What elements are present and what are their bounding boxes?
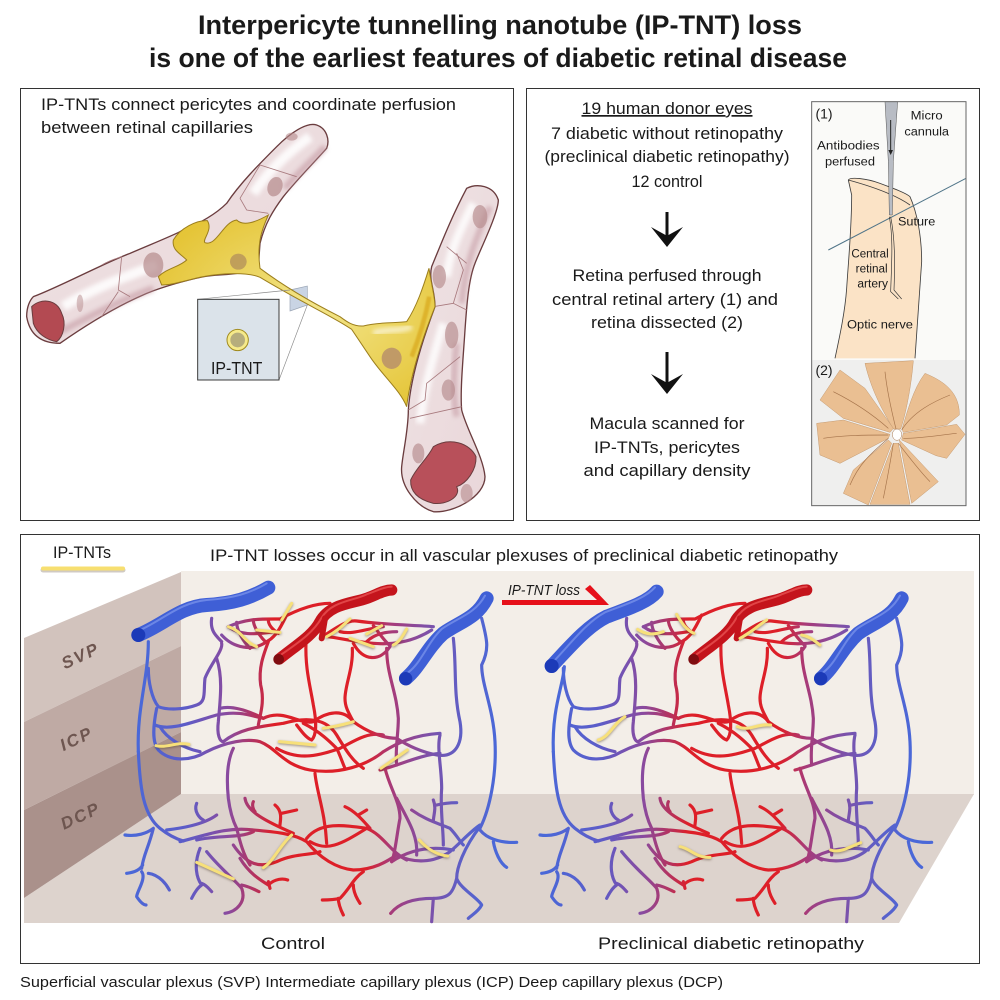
arrow: step 1 to 2 (651, 212, 683, 247)
outer capillary from left vein (553, 667, 564, 752)
plexus labels: SVP (59, 639, 103, 673)
vascular network: control (125, 583, 517, 922)
figure labels: artery (857, 276, 889, 290)
label: preclinical: Preclinical diabetic retinopathy (598, 934, 865, 953)
legend: IP-TNTs (43, 543, 123, 570)
IP-TNT loss arrow (502, 582, 609, 605)
text: panel description: between retinal capillaries (41, 118, 253, 137)
text: macula scan step: IP-TNTs, pericytes (594, 438, 740, 457)
text: donor eyes: 19 human donor eyes (582, 99, 752, 118)
figure labels: cannula (904, 125, 949, 139)
artery (273, 587, 392, 665)
plexus labels: ICP (57, 723, 96, 755)
figure labels: retinal (856, 262, 888, 276)
left capillary (27, 124, 328, 343)
label: control: Control (261, 934, 325, 953)
figure: micro cannula and retina dissection (812, 102, 966, 506)
heading: IP-TNT losses occur in all vascular plexuses of preclinical diabetic retinopathy (210, 546, 839, 565)
dissected retina (817, 361, 965, 505)
text: panel description (41, 95, 456, 137)
text: panel description: IP-TNTs connect pericytes and coordinate perfusion (41, 95, 456, 114)
text: perfusion step: central retinal artery (1) and (552, 290, 778, 309)
figure labels: Suture (898, 214, 935, 228)
title: is one of the earliest features of diabetic retinal disease (149, 43, 847, 73)
text: donor eyes: 12 control (632, 172, 702, 191)
back wall (181, 571, 974, 795)
text: donor eyes: (preclinical diabetic retinopathy) (544, 147, 790, 166)
suture (828, 178, 966, 250)
title: Interpericyte tunnelling nanotube (IP-TNT) loss (198, 10, 802, 40)
footer: abbreviations: Superficial vascular plexus (SVP) Intermediate capillary plexus (ICP) Deep capillary plexus (DCP) (20, 975, 723, 991)
panel: IP-TNT anatomy (20, 88, 514, 520)
text: perfusion step: Retina perfused through (572, 266, 762, 285)
figure labels: Central (851, 246, 889, 260)
cross-section plane (290, 286, 307, 311)
text: perfusion step (552, 266, 778, 332)
plexus labels: DCP (58, 799, 104, 833)
title (149, 10, 847, 73)
figure labels: (1) (815, 105, 833, 121)
artery (688, 587, 807, 665)
legend: IP-TNTs: IP-TNTs (53, 543, 111, 562)
IP-TNTs: preclinical (598, 614, 861, 857)
figure labels: (2) (815, 362, 833, 378)
outer capillary from left vein (138, 642, 148, 752)
veins (131, 583, 487, 685)
panel: study methods (526, 88, 980, 520)
figure labels: Antibodies (817, 139, 880, 153)
text: macula scan step (584, 414, 751, 480)
right capillary (402, 186, 498, 512)
text: perfusion step: retina dissected (2) (591, 313, 743, 332)
IP-TNTs: control (156, 603, 448, 879)
illustration: capillaries and pericytes (27, 124, 498, 512)
figure labels (815, 105, 949, 378)
text: macula scan step: and capillary density (584, 461, 751, 480)
figure labels: perfused (825, 155, 875, 169)
side wall layers (24, 572, 181, 898)
figure labels: Micro (911, 109, 943, 123)
IP-TNT loss arrow: IP-TNT loss (508, 582, 580, 599)
floor (24, 794, 974, 923)
panel: vascular plexuses (20, 534, 980, 964)
text: donor eyes: 7 diabetic without retinopathy (551, 124, 784, 143)
veins (545, 587, 902, 685)
pericytes joined by IP-TNT (158, 215, 435, 407)
micro cannula (885, 102, 898, 215)
optic nerve (835, 178, 922, 358)
inset: IP-TNT cross-section (198, 290, 307, 380)
central retinal artery (889, 217, 902, 299)
arrow: step 2 to 3 (651, 352, 683, 394)
plexus labels (57, 639, 104, 833)
inset: IP-TNT cross-section: IP-TNT (211, 358, 262, 378)
text: macula scan step: Macula scanned for (590, 414, 745, 433)
text: donor eyes (544, 99, 790, 191)
figure labels: Optic nerve (847, 318, 913, 332)
vascular network: preclinical diabetic retinopathy (540, 587, 932, 922)
